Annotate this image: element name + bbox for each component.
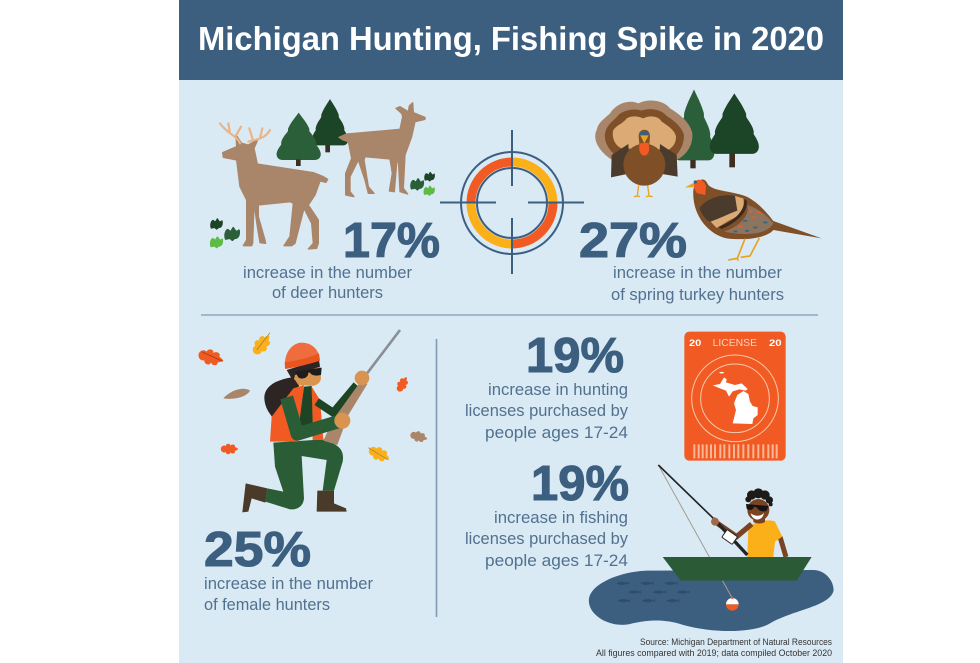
stat: deer hunters: [243, 214, 440, 302]
stat: hunting licenses: 19%: [526, 329, 624, 383]
stat: female hunters: increase in the number: [204, 574, 373, 593]
stat: deer hunters: increase in the number: [243, 263, 412, 282]
title banner: Michigan Hunting, Fishing Spike in 2020: [198, 20, 824, 57]
stat: female hunters: of female hunters: [204, 595, 330, 614]
stat: spring turkey hunters: of spring turkey hunters: [611, 285, 784, 304]
illustration: deer and trees: [211, 99, 434, 249]
source note: [596, 637, 832, 658]
panel: background: [179, 0, 843, 663]
stat: fishing licenses: [465, 457, 629, 570]
stat: fishing licenses: people ages 17-24: [485, 551, 628, 570]
stat: fishing licenses: licenses purchased by: [465, 529, 628, 548]
stat: spring turkey hunters: [579, 214, 784, 304]
stat: deer hunters: of deer hunters: [272, 283, 383, 302]
stat: spring turkey hunters: 27%: [579, 214, 687, 268]
icon: hunting license card: 20: [769, 338, 782, 348]
icon: crosshair target: [440, 130, 584, 274]
stat: deer hunters: 17%: [343, 214, 440, 268]
stat: spring turkey hunters: increase in the number: [613, 263, 782, 282]
stat: hunting licenses: [465, 329, 628, 442]
stat: fishing licenses: increase in fishing: [494, 508, 628, 527]
title banner: [179, 0, 843, 80]
illustration: turkeys and trees: [595, 89, 822, 261]
stat: hunting licenses: licenses purchased by: [465, 401, 628, 420]
source note: All figures compared with 2019; data compiled October 2020: [596, 648, 832, 658]
stat: hunting licenses: increase in hunting: [488, 380, 628, 399]
icon: hunting license card: LICENSE: [713, 338, 758, 349]
stat: female hunters: 25%: [204, 523, 311, 577]
icon: hunting license card: 20: [689, 338, 701, 348]
source note: Source: Michigan Department of Natural Resources: [640, 637, 832, 647]
illustration: fisher in boat on lake: [589, 465, 834, 631]
stat: hunting licenses: people ages 17-24: [485, 423, 628, 442]
stat: fishing licenses: 19%: [531, 457, 629, 511]
illustration: female hunter with falling leaves: [197, 330, 429, 512]
icon: hunting license card: [684, 332, 786, 461]
stat: female hunters: [204, 523, 373, 614]
